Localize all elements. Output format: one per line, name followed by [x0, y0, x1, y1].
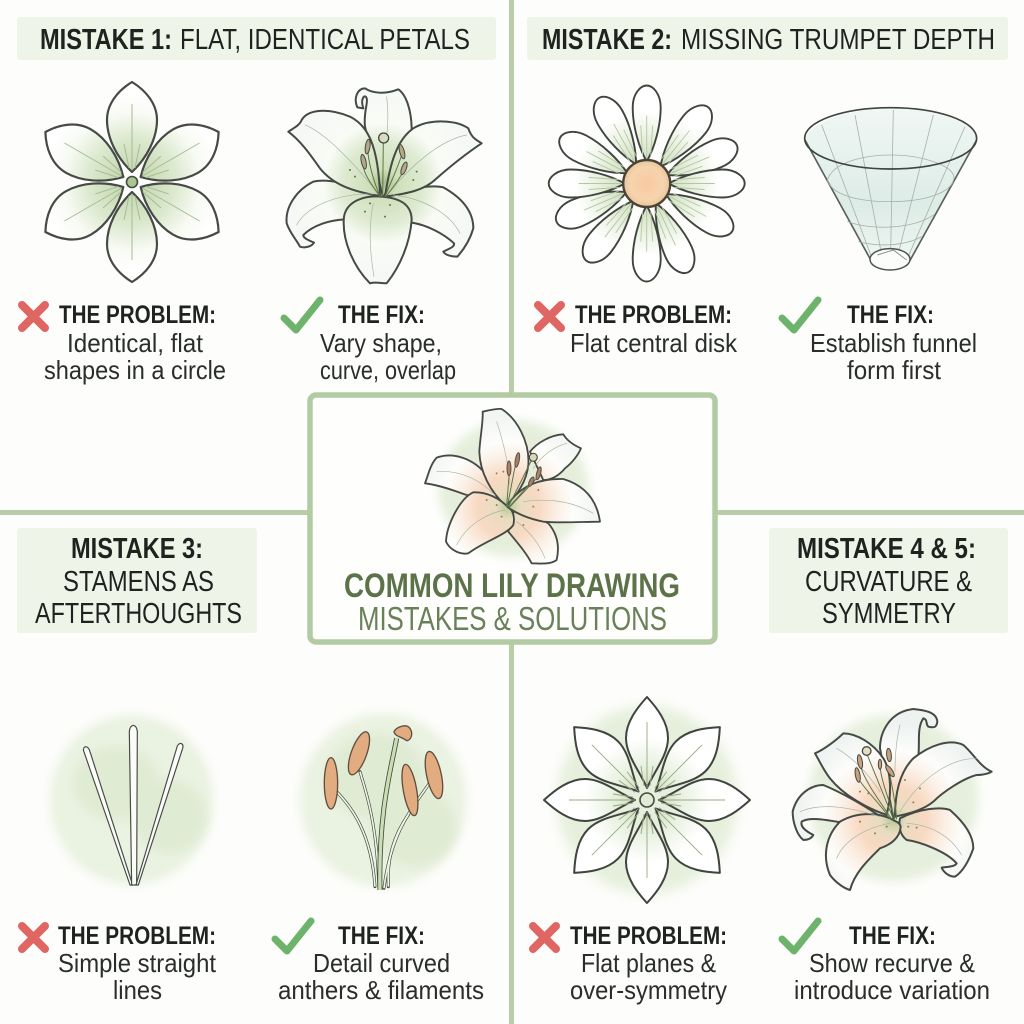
text: problem 1: THE PROBLEM: — [59, 301, 216, 329]
heading: mistake 4 and 5: CURVATURE & — [805, 566, 972, 598]
icon: center lily — [425, 409, 600, 564]
icon: green check — [275, 921, 311, 951]
title: COMMON LILY DRAWING — [344, 567, 680, 605]
text: problem 1 — [44, 301, 226, 385]
text: problem 4: THE PROBLEM: — [570, 922, 727, 950]
text: fix 3: anthers & filaments — [278, 975, 484, 1005]
icon: funnel form — [805, 108, 977, 270]
heading: mistake 2: MISTAKE 2: — [542, 24, 672, 56]
panel: mistake 2 — [527, 17, 1008, 385]
text: problem 1: shapes in a circle — [44, 355, 226, 385]
icon: red cross — [538, 305, 561, 328]
panel: mistake 4 and 5 — [533, 528, 1008, 1005]
heading: mistake 1: MISTAKE 1: — [40, 24, 172, 56]
text: fix 2: Establish funnel — [810, 328, 977, 358]
text: problem 4: Flat planes & — [581, 948, 716, 978]
text: problem 1: Identical, flat — [67, 328, 204, 358]
heading: mistake 4 and 5 — [769, 528, 1008, 633]
text: fix 2 — [810, 301, 977, 385]
text: problem 4: over-symmetry — [570, 975, 727, 1005]
heading: mistake 1: FLAT, IDENTICAL PETALS — [180, 24, 470, 56]
icon: flat six petal flower — [33, 82, 231, 282]
icon: detailed stamens — [300, 713, 467, 890]
text: fix 4: introduce variation — [794, 975, 990, 1005]
text: fix 4: Show recurve & — [809, 948, 975, 978]
text: problem 3: THE PROBLEM: — [58, 922, 216, 950]
icon: green check — [782, 300, 818, 330]
text: fix 1: curve, overlap — [320, 355, 456, 385]
heading: mistake 3: STAMENS AS — [63, 566, 214, 598]
text: fix 1: THE FIX: — [338, 301, 425, 329]
text: fix 2: THE FIX: — [847, 301, 934, 329]
text: problem 4 — [570, 922, 727, 1005]
text: fix 1: Vary shape, — [320, 328, 442, 358]
icon: green check — [284, 300, 320, 330]
text: problem 2: THE PROBLEM: — [575, 301, 732, 329]
icon: symmetric flower — [544, 697, 750, 903]
text: fix 4 — [794, 922, 990, 1005]
heading: mistake 1 — [17, 17, 496, 60]
icon: recurved lily — [793, 709, 992, 890]
text: fix 3 — [278, 922, 484, 1005]
icon: natural lily — [287, 88, 482, 283]
heading: mistake 2 — [527, 17, 1008, 60]
text: fix 4: THE FIX: — [849, 922, 936, 950]
heading: mistake 4 and 5: MISTAKE 4 & 5: — [797, 533, 976, 565]
icon: green check — [782, 921, 818, 951]
text: problem 3 — [58, 922, 217, 1005]
panel: mistake 3 — [17, 528, 484, 1005]
heading: mistake 3: AFTERTHOUGHTS — [35, 598, 242, 630]
text: problem 2: Flat central disk — [570, 328, 738, 358]
panel: mistake 1 — [17, 17, 496, 385]
text: problem 3: Simple straight — [58, 948, 217, 978]
text: fix 1 — [320, 301, 456, 385]
text: fix 2: form first — [847, 355, 942, 385]
icon: red cross — [533, 926, 556, 949]
heading: mistake 3 — [17, 528, 257, 633]
text: problem 3: lines — [113, 975, 162, 1005]
heading: mistake 3: MISTAKE 3: — [71, 533, 203, 565]
text: problem 2 — [570, 301, 738, 358]
icon: red cross — [22, 305, 45, 328]
subtitle: MISTAKES & SOLUTIONS — [358, 600, 667, 637]
icon: red cross — [22, 926, 45, 949]
icon: straight stamens — [50, 715, 213, 885]
icon: daisy with flat disk — [549, 86, 745, 282]
text: fix 3: THE FIX: — [338, 922, 425, 950]
panel: center title card — [310, 395, 715, 642]
heading: mistake 4 and 5: SYMMETRY — [822, 598, 956, 630]
text: fix 3: Detail curved — [313, 948, 450, 978]
